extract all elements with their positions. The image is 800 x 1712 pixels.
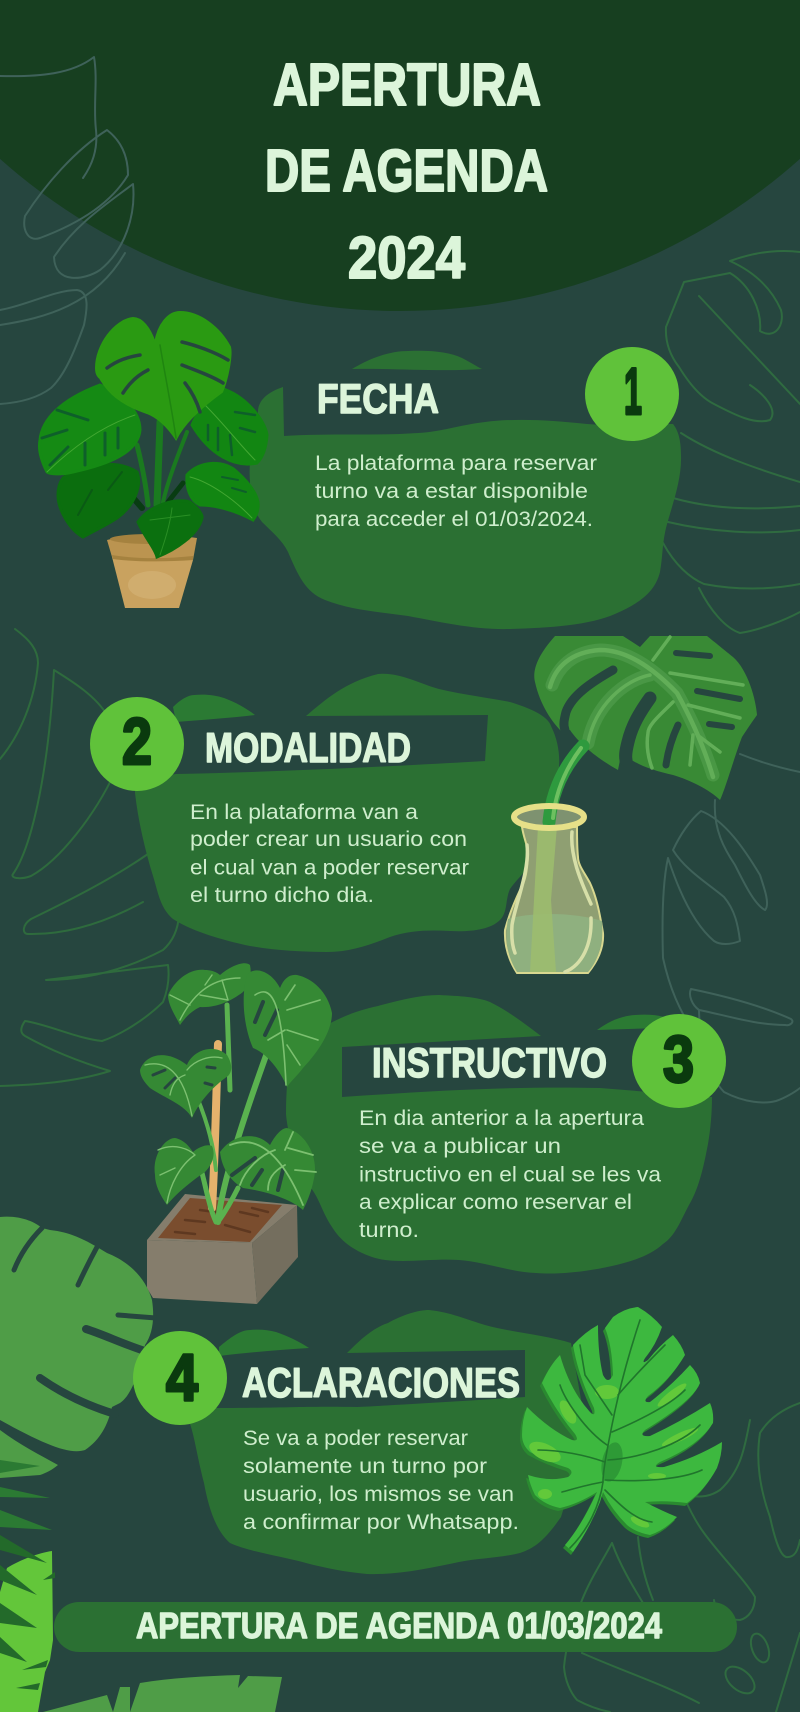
text: fecha: La plataforma para reservar <box>315 451 597 475</box>
outline leaf: top right <box>663 251 800 633</box>
water <box>506 914 602 972</box>
footer banner: APERTURA DE AGENDA 01/03/2024 <box>136 1605 662 1646</box>
title: APERTURA <box>273 52 541 118</box>
text: instructivo: En dia anterior a la apertura <box>359 1106 644 1130</box>
vase highlights <box>512 832 591 972</box>
decorative leaf shape above fecha <box>352 351 482 370</box>
decorative leaf shape above instructivo <box>597 1015 675 1030</box>
stems <box>192 1005 285 1222</box>
text: aclaraciones: a confirmar por Whatsapp. <box>243 1510 519 1534</box>
heading: instructivo: INSTRUCTIVO <box>372 1039 607 1086</box>
number badge 2 <box>90 697 184 791</box>
title: DE AGENDA <box>265 138 548 204</box>
panel: aclaraciones <box>185 1310 587 1574</box>
leaf: left <box>39 385 140 474</box>
stake <box>212 1044 218 1208</box>
vase rim <box>514 806 584 828</box>
vase mouth <box>514 806 584 828</box>
blob: fecha background <box>250 387 681 629</box>
light patches <box>526 1381 700 1530</box>
number badge 4: 4 <box>166 1340 198 1414</box>
pot <box>107 534 197 608</box>
text: modalidad: En la plataforma van a <box>190 800 418 824</box>
title <box>265 52 548 291</box>
heading: fecha: FECHA <box>317 375 439 422</box>
leaf shadow <box>520 1310 720 1555</box>
heading: aclaraciones: ACLARACIONES <box>242 1359 520 1406</box>
number badge 3 <box>632 1014 726 1108</box>
heading: modalidad: MODALIDAD <box>205 724 411 771</box>
leaf: top left <box>168 963 251 1025</box>
text: instructivo: se va a publicar un <box>359 1134 561 1158</box>
leaf: low right <box>187 463 258 520</box>
text: aclaraciones <box>243 1426 519 1534</box>
leaf: bottom <box>138 501 202 557</box>
icon: large leaf bottom left <box>0 1217 156 1478</box>
text: instructivo: a explicar como reservar el <box>359 1190 632 1214</box>
leaf: low left <box>58 464 139 537</box>
number badge 2: 2 <box>122 704 152 778</box>
text: modalidad: el turno dicho dia. <box>190 883 374 907</box>
blob: modalidad background <box>135 674 559 952</box>
text: fecha <box>315 451 597 531</box>
text: modalidad: el cual van a poder reservar <box>190 856 469 880</box>
stem <box>549 746 583 822</box>
icon: palm fronds bottom left <box>0 1460 55 1690</box>
number badge 3: 3 <box>663 1022 694 1096</box>
icon: leaf bottom center <box>43 1675 282 1712</box>
stem highlight <box>553 748 581 818</box>
text: instructivo: turno. <box>359 1218 419 1242</box>
big monstera leaf <box>534 636 757 800</box>
header semicircle <box>0 0 800 311</box>
outline leaves: bottom right <box>564 1403 800 1712</box>
panel: fecha <box>250 347 681 629</box>
icon: bright leaf bottom left <box>0 1551 53 1712</box>
stems <box>122 422 187 508</box>
leaf: mid left <box>140 1049 231 1118</box>
blob: aclaraciones background <box>185 1310 587 1574</box>
icon: leaf in glass vase <box>505 636 757 973</box>
text: fecha: turno va a estar disponible <box>315 479 588 503</box>
text: fecha: para acceder el 01/03/2024. <box>315 507 593 531</box>
number badge 1 <box>585 347 679 441</box>
panel: instructivo <box>286 995 726 1274</box>
darker centre <box>598 1440 626 1484</box>
blob: instructivo background <box>286 995 712 1274</box>
outline leaf: top left <box>0 57 133 404</box>
text: instructivo: instructivo en el cual se les va <box>359 1162 661 1186</box>
number badge 1: 1 <box>624 354 642 428</box>
leaf: right <box>192 388 267 464</box>
text: aclaraciones: solamente un turno por <box>243 1454 487 1478</box>
vase body <box>505 827 603 973</box>
planter <box>147 1194 298 1304</box>
stem inside vase <box>530 826 557 972</box>
leaf body <box>522 1307 722 1552</box>
leaf: top <box>96 312 231 439</box>
title: 2024 <box>348 225 465 291</box>
panel: modalidad <box>90 674 559 952</box>
decorative leaf shape above modalidad <box>173 695 255 722</box>
number badge 4 <box>133 1331 227 1425</box>
veins <box>538 1320 702 1548</box>
text: aclaraciones: Se va a poder reservar <box>243 1426 468 1450</box>
text: instructivo <box>359 1106 661 1242</box>
icon: bright monstera leaf <box>520 1307 722 1555</box>
text: aclaraciones: usuario, los mismos se van <box>243 1482 514 1506</box>
leaf: top right <box>244 970 332 1087</box>
outline leaves: left middle <box>0 629 179 1086</box>
leaf: low right <box>220 1128 316 1210</box>
text: modalidad: poder crear un usuario con <box>190 827 467 851</box>
icon: potted monstera <box>39 312 267 608</box>
text: modalidad <box>190 800 469 907</box>
outline leaves: right middle <box>663 754 800 1102</box>
leaf: low left <box>155 1138 214 1205</box>
decorative leaf shape above aclaraciones <box>219 1330 309 1356</box>
icon: monstera in square planter <box>140 963 332 1304</box>
